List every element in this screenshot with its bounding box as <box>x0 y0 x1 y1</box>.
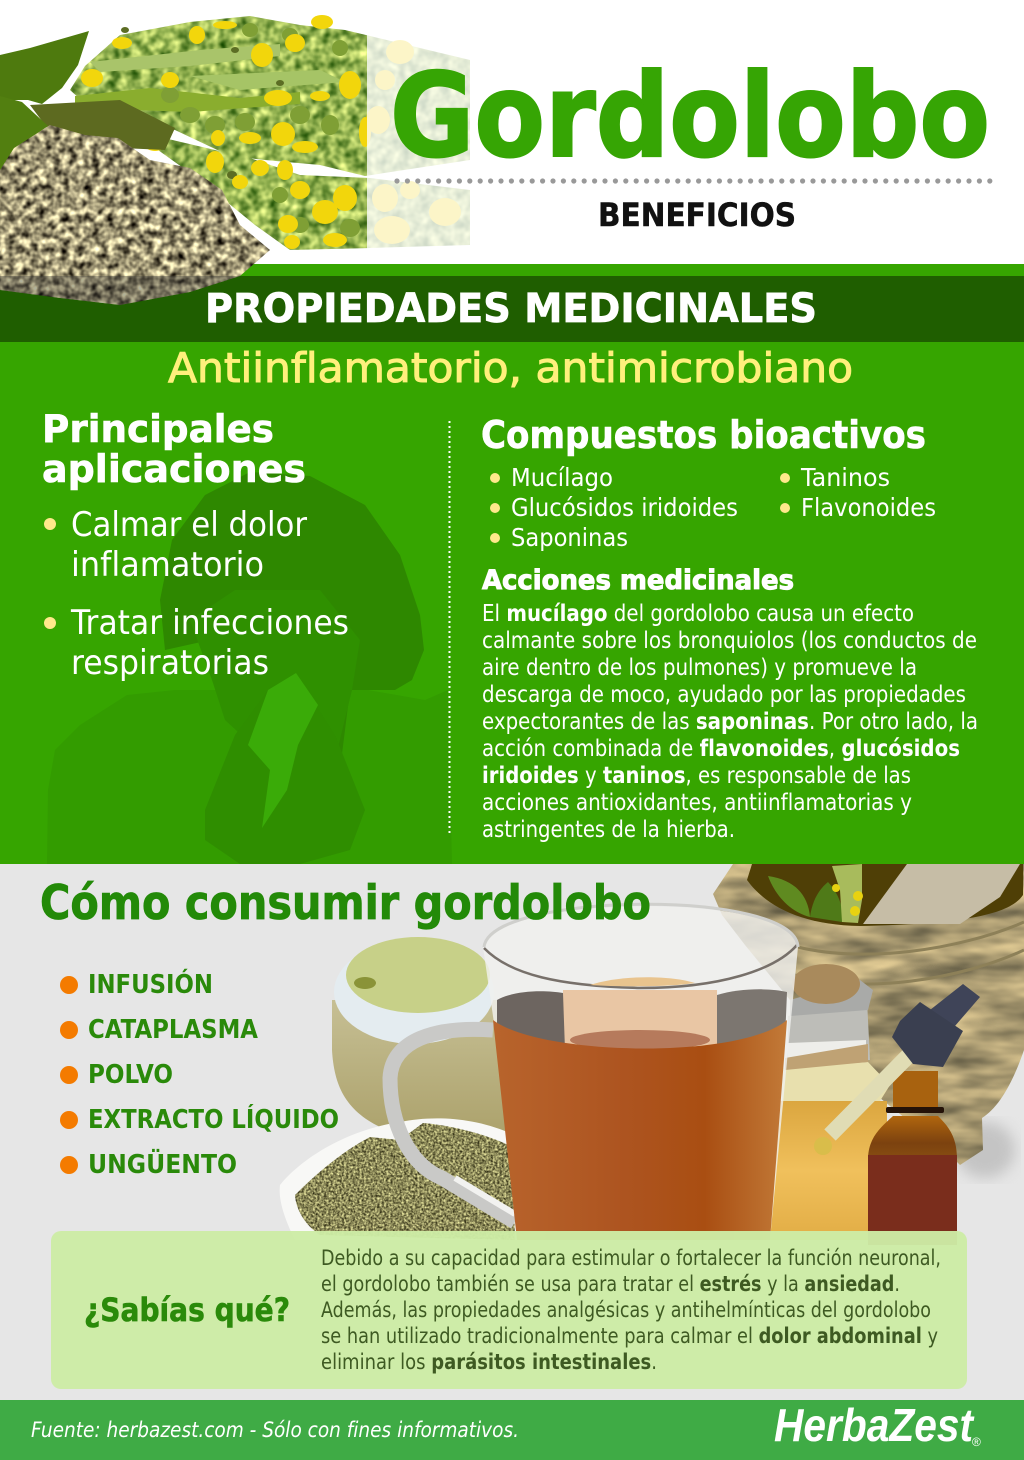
pipette drop <box>814 1137 832 1155</box>
mortar inside <box>747 864 1023 926</box>
jar white lower <box>788 1040 866 1058</box>
green panel: medicinal properties background <box>0 264 1024 864</box>
dotted divider under title <box>394 178 992 184</box>
dropper cap <box>892 1002 963 1067</box>
pipette <box>830 1051 913 1135</box>
list: ways to consume: POLVO <box>88 1060 173 1090</box>
photo: flower spikes <box>70 15 367 250</box>
heading: Principales aplicaciones: aplicaciones <box>42 447 306 491</box>
callout text: el gordolobo también se usa para tratar el estrés y la ansiedad. <box>321 1272 900 1296</box>
compound list: Taninos <box>800 463 890 492</box>
text block: medicinal actions: aire dentro de los pulmones) y promueve la <box>482 655 917 681</box>
column: main applications <box>42 407 349 683</box>
jar glass neck <box>788 1010 870 1060</box>
rim front <box>484 945 797 988</box>
compound list <box>490 463 936 552</box>
tea top glow <box>590 977 695 986</box>
logo: HerbaZest: HerbaZest <box>774 1399 974 1451</box>
tea <box>493 1020 787 1240</box>
face <box>190 590 360 775</box>
bottle collar <box>886 1107 944 1113</box>
heading: Cómo consumir gordolobo: Cómo consumir gordolobo <box>40 876 651 931</box>
list: ways to consume <box>60 968 339 1180</box>
shirt <box>47 690 452 864</box>
heading: Compuestos bioactivos: Compuestos bioactivos <box>481 413 926 457</box>
liquid back left <box>497 991 565 1043</box>
flower sprig <box>832 864 862 923</box>
jar white ring <box>334 959 493 1044</box>
photo: dried herb pile <box>0 125 270 305</box>
list item: Calmar el dolor inflamatorio: Calmar el dolor <box>71 505 307 545</box>
footer band <box>0 1400 1024 1460</box>
hands <box>205 680 365 864</box>
rim back <box>484 904 798 947</box>
liquid back right <box>717 989 787 1050</box>
mug handle <box>390 1029 515 1222</box>
glass lip <box>790 980 873 1016</box>
twine <box>785 1044 868 1070</box>
cream pit <box>354 977 376 989</box>
honey <box>767 1101 887 1240</box>
liquid back centre <box>563 990 717 1050</box>
compound list: Saponinas <box>511 523 628 552</box>
text block: medicinal actions <box>482 601 978 843</box>
list: ways to consume: UNGÜENTO <box>88 1147 237 1180</box>
text block: medicinal actions: expectorantes de las saponinas. Por otro lado, la <box>482 709 978 735</box>
herb leaf left <box>768 876 810 917</box>
tea surface reflection <box>570 1030 710 1050</box>
sprig flowers <box>832 884 863 916</box>
list item: Calmar el dolor inflamatorio: inflamatorio <box>71 545 264 585</box>
tissue <box>248 673 318 828</box>
subheading: Antiinflamatorio, antimicrobiano: Antiinflamatorio, antimicrobiano <box>168 344 853 392</box>
compound list: Mucílago <box>511 463 613 492</box>
bottle shoulder <box>868 1116 957 1170</box>
heading: PROPIEDADES MEDICINALES: PROPIEDADES MEDICINALES <box>205 286 817 332</box>
photo: green leaf lower <box>0 96 48 172</box>
compound list: Glucósidos iridoides <box>511 493 738 522</box>
jar shoulder <box>782 1062 890 1101</box>
band: dark green heading strip <box>0 276 1024 342</box>
compound list: Flavonoides <box>801 493 936 522</box>
footer source text: Fuente: herbazest.com - Sólo con fines informativos. <box>31 1418 519 1442</box>
grey panel: how to consume <box>0 864 1024 1400</box>
photo: faded flower spikes behind title <box>367 35 470 248</box>
dotted column divider <box>448 421 450 836</box>
jar body <box>332 1000 510 1135</box>
text block: medicinal actions: acciones antioxidantes, antiinflamatorias y <box>482 790 912 816</box>
heading: Acciones medicinales: Acciones medicinales <box>482 565 794 596</box>
mortar shadow <box>955 1122 1015 1178</box>
glass mug of tea <box>390 904 798 1240</box>
photo: dark stem area behind herb <box>30 100 175 150</box>
subtitle: BENEFICIOS: BENEFICIOS <box>598 196 796 234</box>
callout box <box>51 1231 967 1389</box>
mortar rim grooves <box>790 922 1024 984</box>
glass body <box>483 906 798 1240</box>
column: bioactive compounds <box>481 413 978 843</box>
callout text: eliminar los parásitos intestinales. <box>321 1350 657 1374</box>
background photo: woman blowing nose (green tint) <box>47 472 452 864</box>
ointment jar <box>332 937 510 1135</box>
list item: Tratar infecciones respiratorias <box>44 603 349 683</box>
heading: Principales aplicaciones <box>42 407 306 491</box>
list item: Calmar el dolor inflamatorio <box>44 505 307 585</box>
bottle neck <box>893 1071 938 1112</box>
text block: medicinal actions: iridoides y taninos, es responsable de las <box>482 763 911 789</box>
herb leaf right <box>810 882 842 922</box>
pestle <box>863 864 1020 924</box>
cork <box>792 964 860 1004</box>
hair <box>160 472 424 770</box>
mortar and pestle <box>713 864 1024 1178</box>
logo: HerbaZest: ® <box>972 1435 981 1449</box>
dropper bottle and pipette <box>814 984 980 1245</box>
dropper nub <box>930 984 980 1026</box>
list item: Tratar infecciones respiratorias: respiratorias <box>71 643 269 683</box>
heading: Principales aplicaciones: Principales <box>42 407 274 451</box>
cream <box>346 937 490 1013</box>
bottle body <box>868 1155 957 1245</box>
header photo: mullein flower spikes, leaves and dried herb <box>0 15 470 305</box>
photo group: preparations <box>280 864 1024 1245</box>
callout heading: ¿Sabías qué?: ¿Sabías qué? <box>84 1291 290 1329</box>
text block: medicinal actions: acción combinada de flavonoides, glucósidos <box>482 736 960 762</box>
list: ways to consume: INFUSIÓN <box>88 968 213 1000</box>
background: white header <box>0 0 1024 264</box>
text block: medicinal actions: El mucílago del gordolobo causa un efecto <box>482 601 914 627</box>
callout text: se han utilizado tradicionalmente para calmar el dolor abdominal y <box>321 1324 938 1348</box>
callout: did you know <box>51 1231 967 1389</box>
honey jar with cork <box>767 964 890 1240</box>
mortar body <box>713 864 1024 1165</box>
list: ways to consume: CATAPLASMA <box>88 1015 258 1045</box>
photo: green leaf upper <box>0 31 89 104</box>
bowl with powdered herb <box>280 1118 520 1240</box>
list item: Tratar infecciones respiratorias: Tratar infecciones <box>70 603 349 643</box>
photo: shaded herb over band <box>0 276 240 305</box>
list: ways to consume: EXTRACTO LÍQUIDO <box>88 1103 339 1135</box>
callout text <box>321 1246 941 1374</box>
handle highlight <box>455 1178 515 1214</box>
text block: medicinal actions: astringentes de la hierba. <box>482 817 735 843</box>
